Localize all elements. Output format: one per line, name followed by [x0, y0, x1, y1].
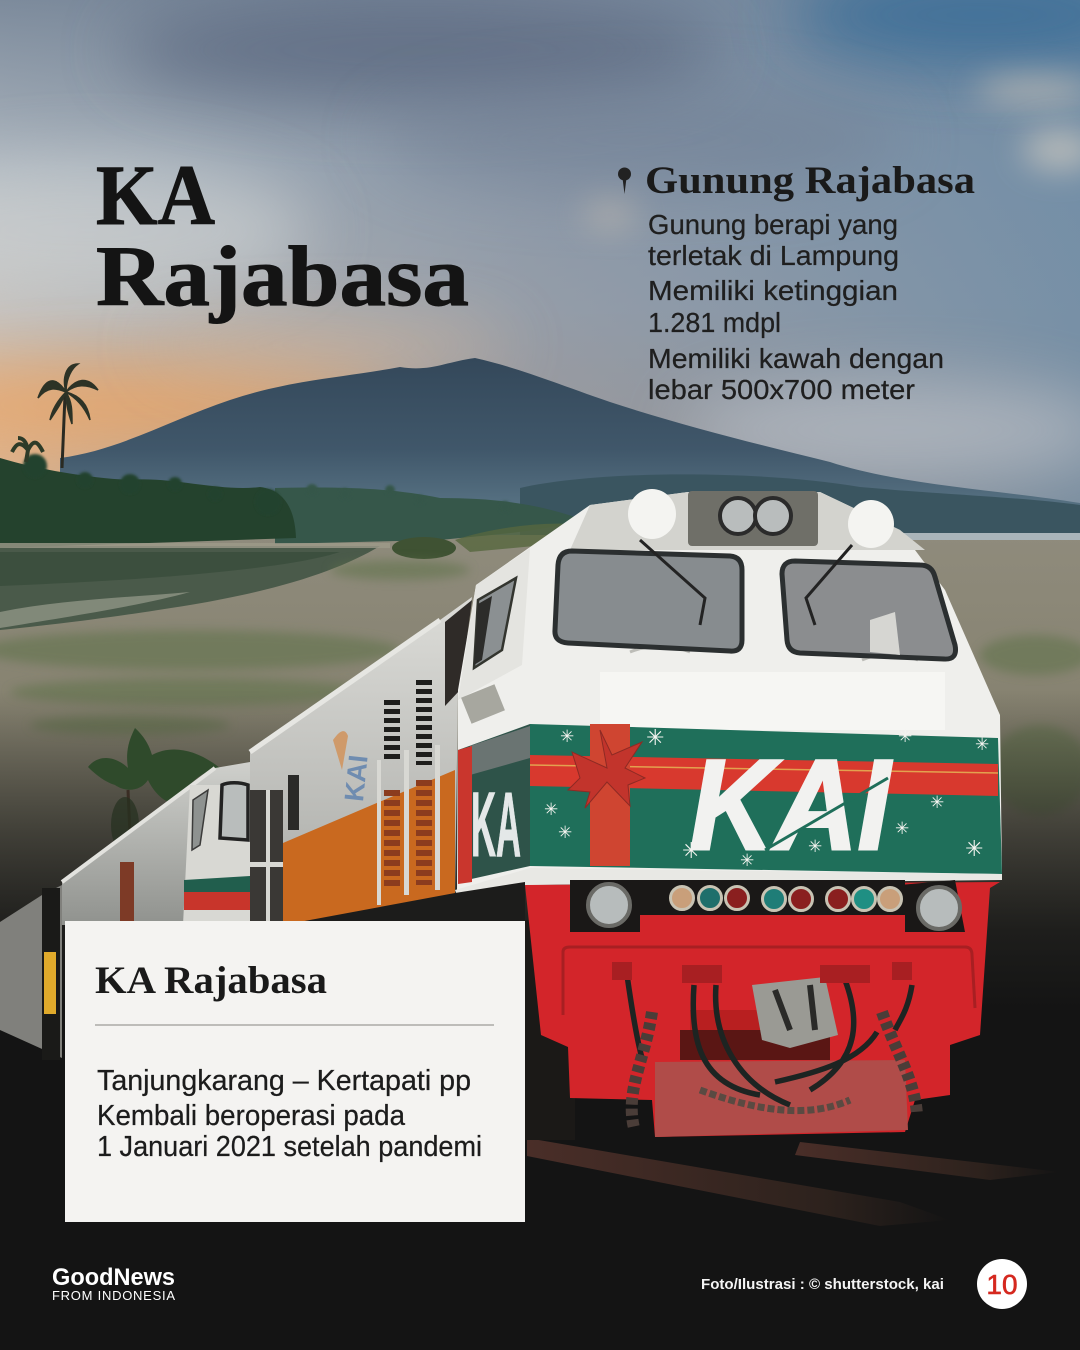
snowflakes: ✳ [975, 735, 989, 754]
bottom dark fade [0, 690, 1080, 1010]
grass patches [0, 560, 1080, 815]
windscreen right [782, 561, 956, 659]
lagoon [0, 546, 380, 630]
snowflakes: ✳ [646, 725, 664, 750]
snowflakes: ✳ [895, 819, 909, 838]
roof lamps [688, 491, 818, 546]
location block: Gunung Rajabasa: Memiliki kawah dengan [648, 343, 944, 374]
rails [527, 1138, 1060, 1226]
page number badge [977, 1259, 1027, 1309]
logo: GoodNews from Indonesia: FROM INDONESIA [52, 1288, 175, 1303]
foliage near train [88, 728, 220, 853]
snowflakes: ✳ [740, 851, 754, 870]
red lower body [525, 882, 1000, 1137]
train: KA [471, 774, 521, 876]
snowflakes [544, 725, 989, 870]
title: KA [96, 147, 215, 243]
snowflakes: ✳ [544, 800, 558, 819]
head lamps [588, 884, 960, 929]
location block: Gunung Rajabasa: Gunung berapi yang [648, 209, 898, 240]
title: Rajabasa [96, 228, 469, 324]
coupler and hoses [563, 947, 975, 1128]
snowflakes: ✳ [930, 793, 944, 812]
hood windows and frames [250, 790, 283, 925]
icon: location pin [618, 168, 631, 194]
snowflakes: ✳ [965, 836, 983, 861]
panel: KA Rajabasa info card: 1 Januari 2021 setelah pandemi [97, 1131, 482, 1163]
snowflakes: ✳ [682, 838, 700, 863]
panel: KA Rajabasa info card: KA Rajabasa [95, 959, 327, 1002]
ground [0, 535, 1080, 1035]
ribbon bow [568, 730, 645, 808]
mountain [60, 358, 1080, 560]
train [0, 489, 1002, 1140]
page number badge: 10 [986, 1269, 1018, 1300]
hood KAI mark: KAI [339, 753, 374, 803]
location block: Gunung Rajabasa: 1.281 mdpl [648, 307, 781, 338]
background photo: sky and beach landscape [0, 0, 1080, 1035]
panel: KA Rajabasa info card [65, 921, 525, 1222]
photo credit: Foto/Ilustrasi : © shutterstock, kai [701, 1276, 944, 1293]
second carriage [62, 762, 250, 925]
snowflakes: ✳ [558, 823, 572, 842]
rear carriage [0, 885, 62, 1058]
snowflakes: ✳ [808, 837, 822, 856]
location block: Gunung Rajabasa: terletak di Lampung [648, 240, 899, 271]
tree line [275, 487, 578, 544]
snowflakes: ✳ [560, 727, 574, 746]
red stripe [530, 755, 998, 796]
logo: GoodNews from Indonesia [52, 1264, 175, 1303]
green livery band [530, 724, 1002, 874]
logo: GoodNews from Indonesia: GoodNews [52, 1264, 175, 1291]
windscreen left [555, 551, 742, 651]
lamp housing [570, 880, 965, 932]
title [96, 147, 469, 324]
palm trees [12, 364, 98, 468]
location block: Gunung Rajabasa: Memiliki ketinggian [648, 275, 898, 306]
cab main body [457, 492, 1002, 890]
panel: KA Rajabasa info card: Kembali beroperasi pada [97, 1100, 406, 1132]
snowflakes: ✳ [898, 727, 912, 746]
location block: Gunung Rajabasa: lebar 500x700 meter [648, 374, 915, 405]
location block: Gunung Rajabasa [618, 159, 975, 405]
panel: KA Rajabasa info card: Tanjungkarang – Kertapati pp [97, 1065, 471, 1097]
louvers [392, 680, 424, 890]
under-frame [283, 882, 525, 925]
location block: Gunung Rajabasa: Gunung Rajabasa [645, 159, 975, 202]
locomotive side hood [250, 597, 472, 925]
KAI logo: KAI [690, 734, 892, 877]
white sill [455, 868, 1002, 895]
